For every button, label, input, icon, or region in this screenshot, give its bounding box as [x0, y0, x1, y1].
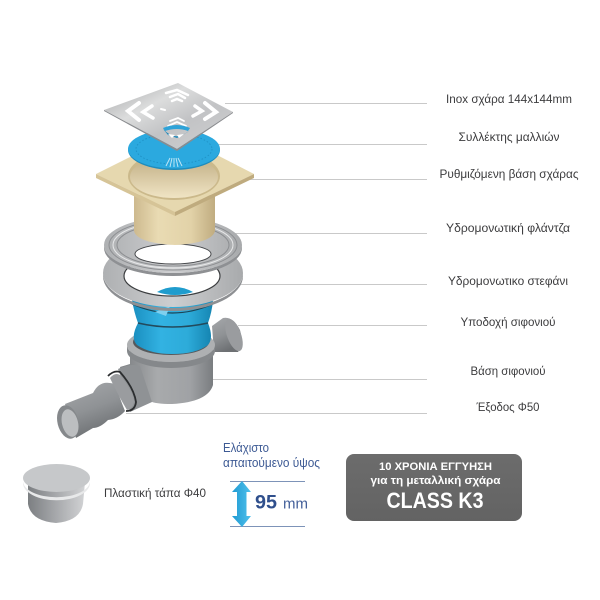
label: adjustable base: Ρυθμιζόμενη βάση σχάρας: [440, 167, 579, 181]
label: flange: Υδρομονωτική φλάντζα: [446, 221, 570, 235]
label: outlet: Έξοδος Φ50: [476, 400, 540, 414]
part: adjustable grate base: [96, 134, 254, 245]
badge: warranty: [346, 454, 522, 521]
label: siphon receiver: Υποδοχή σιφονιού: [460, 315, 556, 329]
dimension value: [255, 492, 308, 514]
label: inox grate: Inox σχάρα 144x144mm: [446, 92, 572, 106]
arrow: height: [232, 481, 251, 527]
dimension value: mm: [283, 496, 308, 512]
part: outlet pipe Φ50: [54, 383, 125, 441]
badge: warranty: για τη μεταλλική σχάρα: [370, 475, 501, 487]
icon: plastic cap: [23, 464, 90, 523]
part: hair collector: [128, 130, 220, 170]
part: waterproof flange: [104, 217, 242, 276]
label: plastic cap: Πλαστική τάπα Φ40: [104, 486, 206, 500]
part: blue siphon receiver: [132, 300, 213, 354]
badge: warranty: CLASS K3: [386, 488, 484, 513]
label: hair collector: Συλλέκτης μαλλιών: [458, 130, 560, 144]
part: inox grate: [104, 83, 233, 151]
heading: minimum height: απαιτούμενο ύψος: [223, 456, 320, 470]
heading: minimum height: [223, 441, 320, 470]
part: waterproof ring: [103, 239, 243, 311]
badge: warranty: 10 ΧΡΟΝΙΑ ΕΓΓΥΗΣΗ: [379, 461, 492, 473]
label: ring: Υδρομονωτικο στεφάνι: [448, 274, 568, 288]
label: siphon base: Βάση σιφονιού: [470, 364, 546, 378]
product: exploded drain assembly: [54, 83, 254, 441]
part: siphon base: [108, 317, 246, 412]
leader lines: [126, 104, 427, 414]
dimension lines: [230, 482, 305, 526]
labels: [440, 92, 579, 414]
dimension value: 95: [255, 492, 277, 514]
heading: minimum height: Ελάχιστο: [223, 441, 269, 455]
